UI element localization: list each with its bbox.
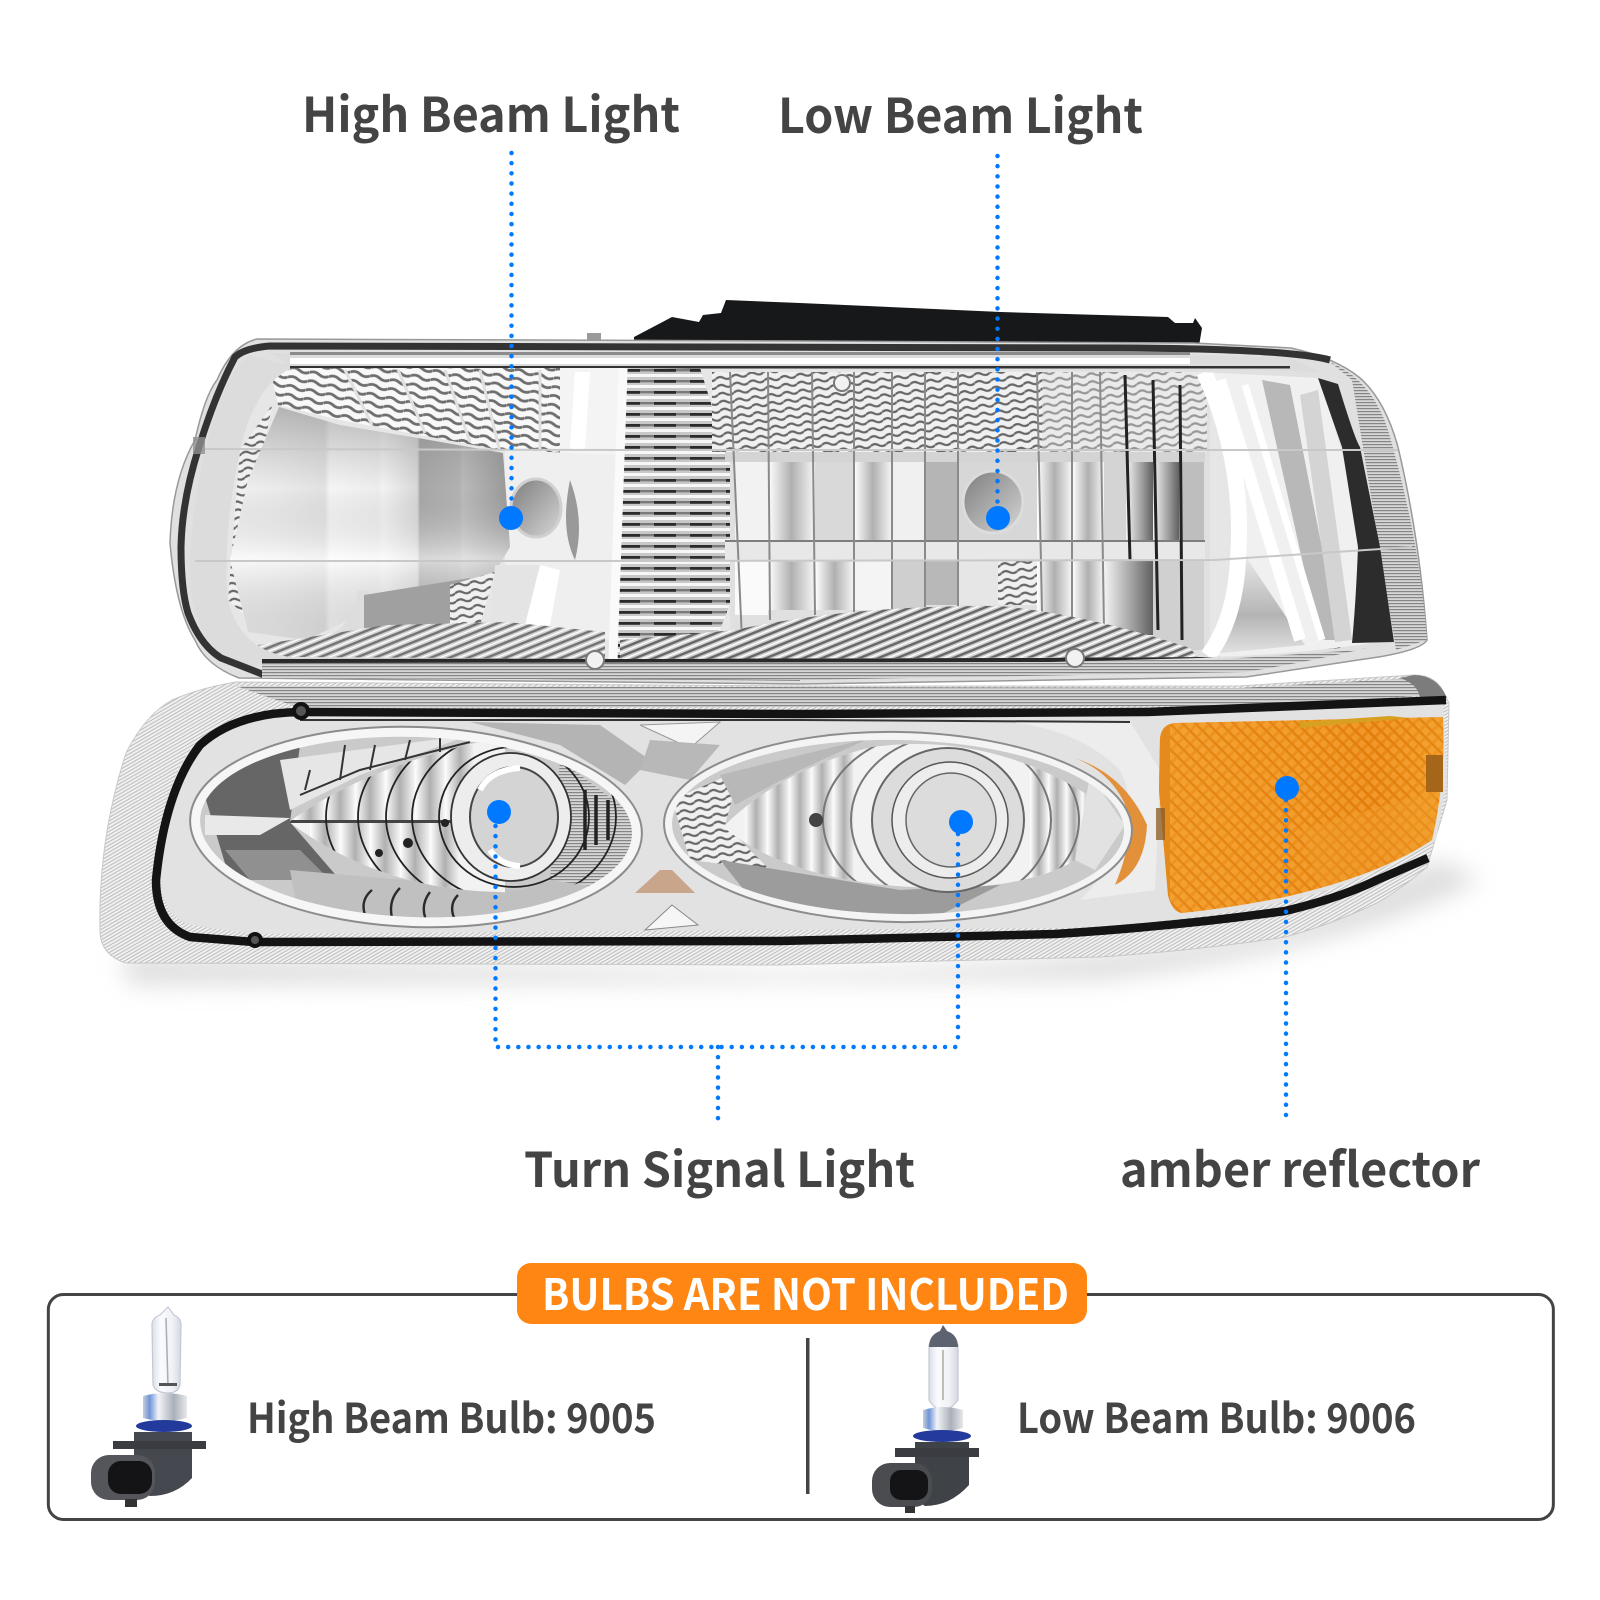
- label: amber reflector: amber reflector: [1120, 1131, 1480, 1201]
- icon: 9006 low beam bulb: [872, 1325, 979, 1513]
- cone lower facets: [334, 614, 364, 633]
- amber mesh texture: [1158, 715, 1448, 915]
- inner chrome panel: [160, 703, 1447, 934]
- lens clip bump: [193, 437, 205, 454]
- right oval chrome lens: [725, 744, 1086, 888]
- high beam left stripe margin: [228, 405, 272, 620]
- right corner reflector: [1213, 373, 1373, 657]
- lens screws: [586, 375, 1084, 669]
- right oval left pocket: [672, 770, 770, 870]
- high beam callout: [499, 153, 523, 530]
- label: High Beam Light: High Beam Light: [302, 76, 680, 146]
- left oval interior: [200, 736, 632, 918]
- icon: 9005 high beam bulb: [91, 1307, 206, 1507]
- inner thin gasket line: [300, 720, 1130, 722]
- gasket screws: [249, 704, 308, 946]
- right ribbed fan: [550, 764, 632, 886]
- amber reflector callout: [1275, 776, 1299, 1124]
- black rear housing: [634, 300, 1202, 346]
- right oval disc rings: [872, 748, 1024, 892]
- right oval interior: [672, 740, 1124, 914]
- right oval bottom pocket: [720, 860, 1000, 915]
- top bezel band: [236, 678, 1435, 708]
- warning badge: [517, 1261, 1087, 1324]
- high beam hole: [511, 479, 561, 537]
- low beam middle cells: [735, 462, 1204, 540]
- left oval disc rings: [451, 753, 571, 881]
- panel divider: [806, 1338, 810, 1494]
- low beam top wavy cells: [712, 372, 1042, 452]
- left oval top ribs: [280, 738, 456, 810]
- callout lines and dots: [487, 153, 1299, 1124]
- dark gasket line: [181, 346, 1330, 677]
- label: Low Beam Light: Low Beam Light: [778, 77, 1143, 147]
- low beam hole: [963, 471, 1023, 533]
- right oval top pocket: [720, 738, 870, 805]
- bulb info panel: [48, 1261, 1553, 1520]
- upper headlight assembly: [170, 300, 1427, 684]
- low beam base: [730, 464, 735, 603]
- outer clear rim: [170, 339, 1427, 684]
- low beam horizontal bars: [725, 452, 1205, 462]
- mounting stud: [587, 333, 601, 340]
- left inner rim: [190, 355, 300, 668]
- amber top glint: [1300, 716, 1410, 728]
- right oval chrome ring: [662, 728, 1134, 926]
- left oval chrome ring: [187, 719, 645, 935]
- amber lens: [1159, 717, 1444, 913]
- black gasket ring: [156, 700, 1446, 942]
- low beam vertical cell dividers: [730, 372, 1104, 640]
- text: low beam bulb: Low Beam Bulb: 9006: [1017, 1385, 1416, 1445]
- high beam cone: [230, 407, 510, 640]
- lower turn signal assembly: [100, 675, 1449, 965]
- lens contents: [220, 360, 1400, 670]
- high beam upper wavy reflector: [273, 368, 560, 452]
- right rim shade: [1400, 675, 1447, 700]
- low beam callout: [986, 156, 1010, 530]
- panel border: [48, 1294, 1553, 1520]
- high beam bottom hatch: [258, 622, 605, 660]
- right oval far end pocket: [1075, 784, 1124, 870]
- lamp soft shadow: [120, 860, 1480, 985]
- right fine ribbed rim: [1330, 362, 1427, 650]
- lens horizontal mould lines: [195, 449, 1412, 561]
- left oval bottom pocket: [290, 870, 602, 918]
- orange crescent: [1075, 758, 1147, 885]
- low beam lower cells: [735, 560, 1204, 650]
- left oval lamp: [189, 726, 643, 928]
- amber reflector: [1156, 715, 1448, 915]
- bottom ribbed band: [262, 642, 1392, 680]
- left oval chrome lens: [289, 742, 617, 892]
- warning badge text: BULBS ARE NOT INCLUDED: [542, 1261, 1069, 1323]
- right dark gasket band: [1318, 378, 1394, 643]
- high beam side white panel: [505, 450, 618, 640]
- outer clear bezel: [100, 675, 1449, 965]
- left pocket dark: [200, 745, 340, 880]
- amber side slot: [1426, 755, 1443, 792]
- turn signal callout: [487, 800, 973, 1122]
- low beam bottom hatch: [620, 606, 1200, 660]
- central ribbed section: [614, 368, 735, 660]
- right oval lamp: [662, 728, 1135, 926]
- chrome panel dark shading: [470, 722, 650, 785]
- top chrome band: [270, 353, 1320, 372]
- text: high beam bulb: High Beam Bulb: 9005: [247, 1385, 656, 1445]
- label: Turn Signal Light: Turn Signal Light: [524, 1131, 915, 1201]
